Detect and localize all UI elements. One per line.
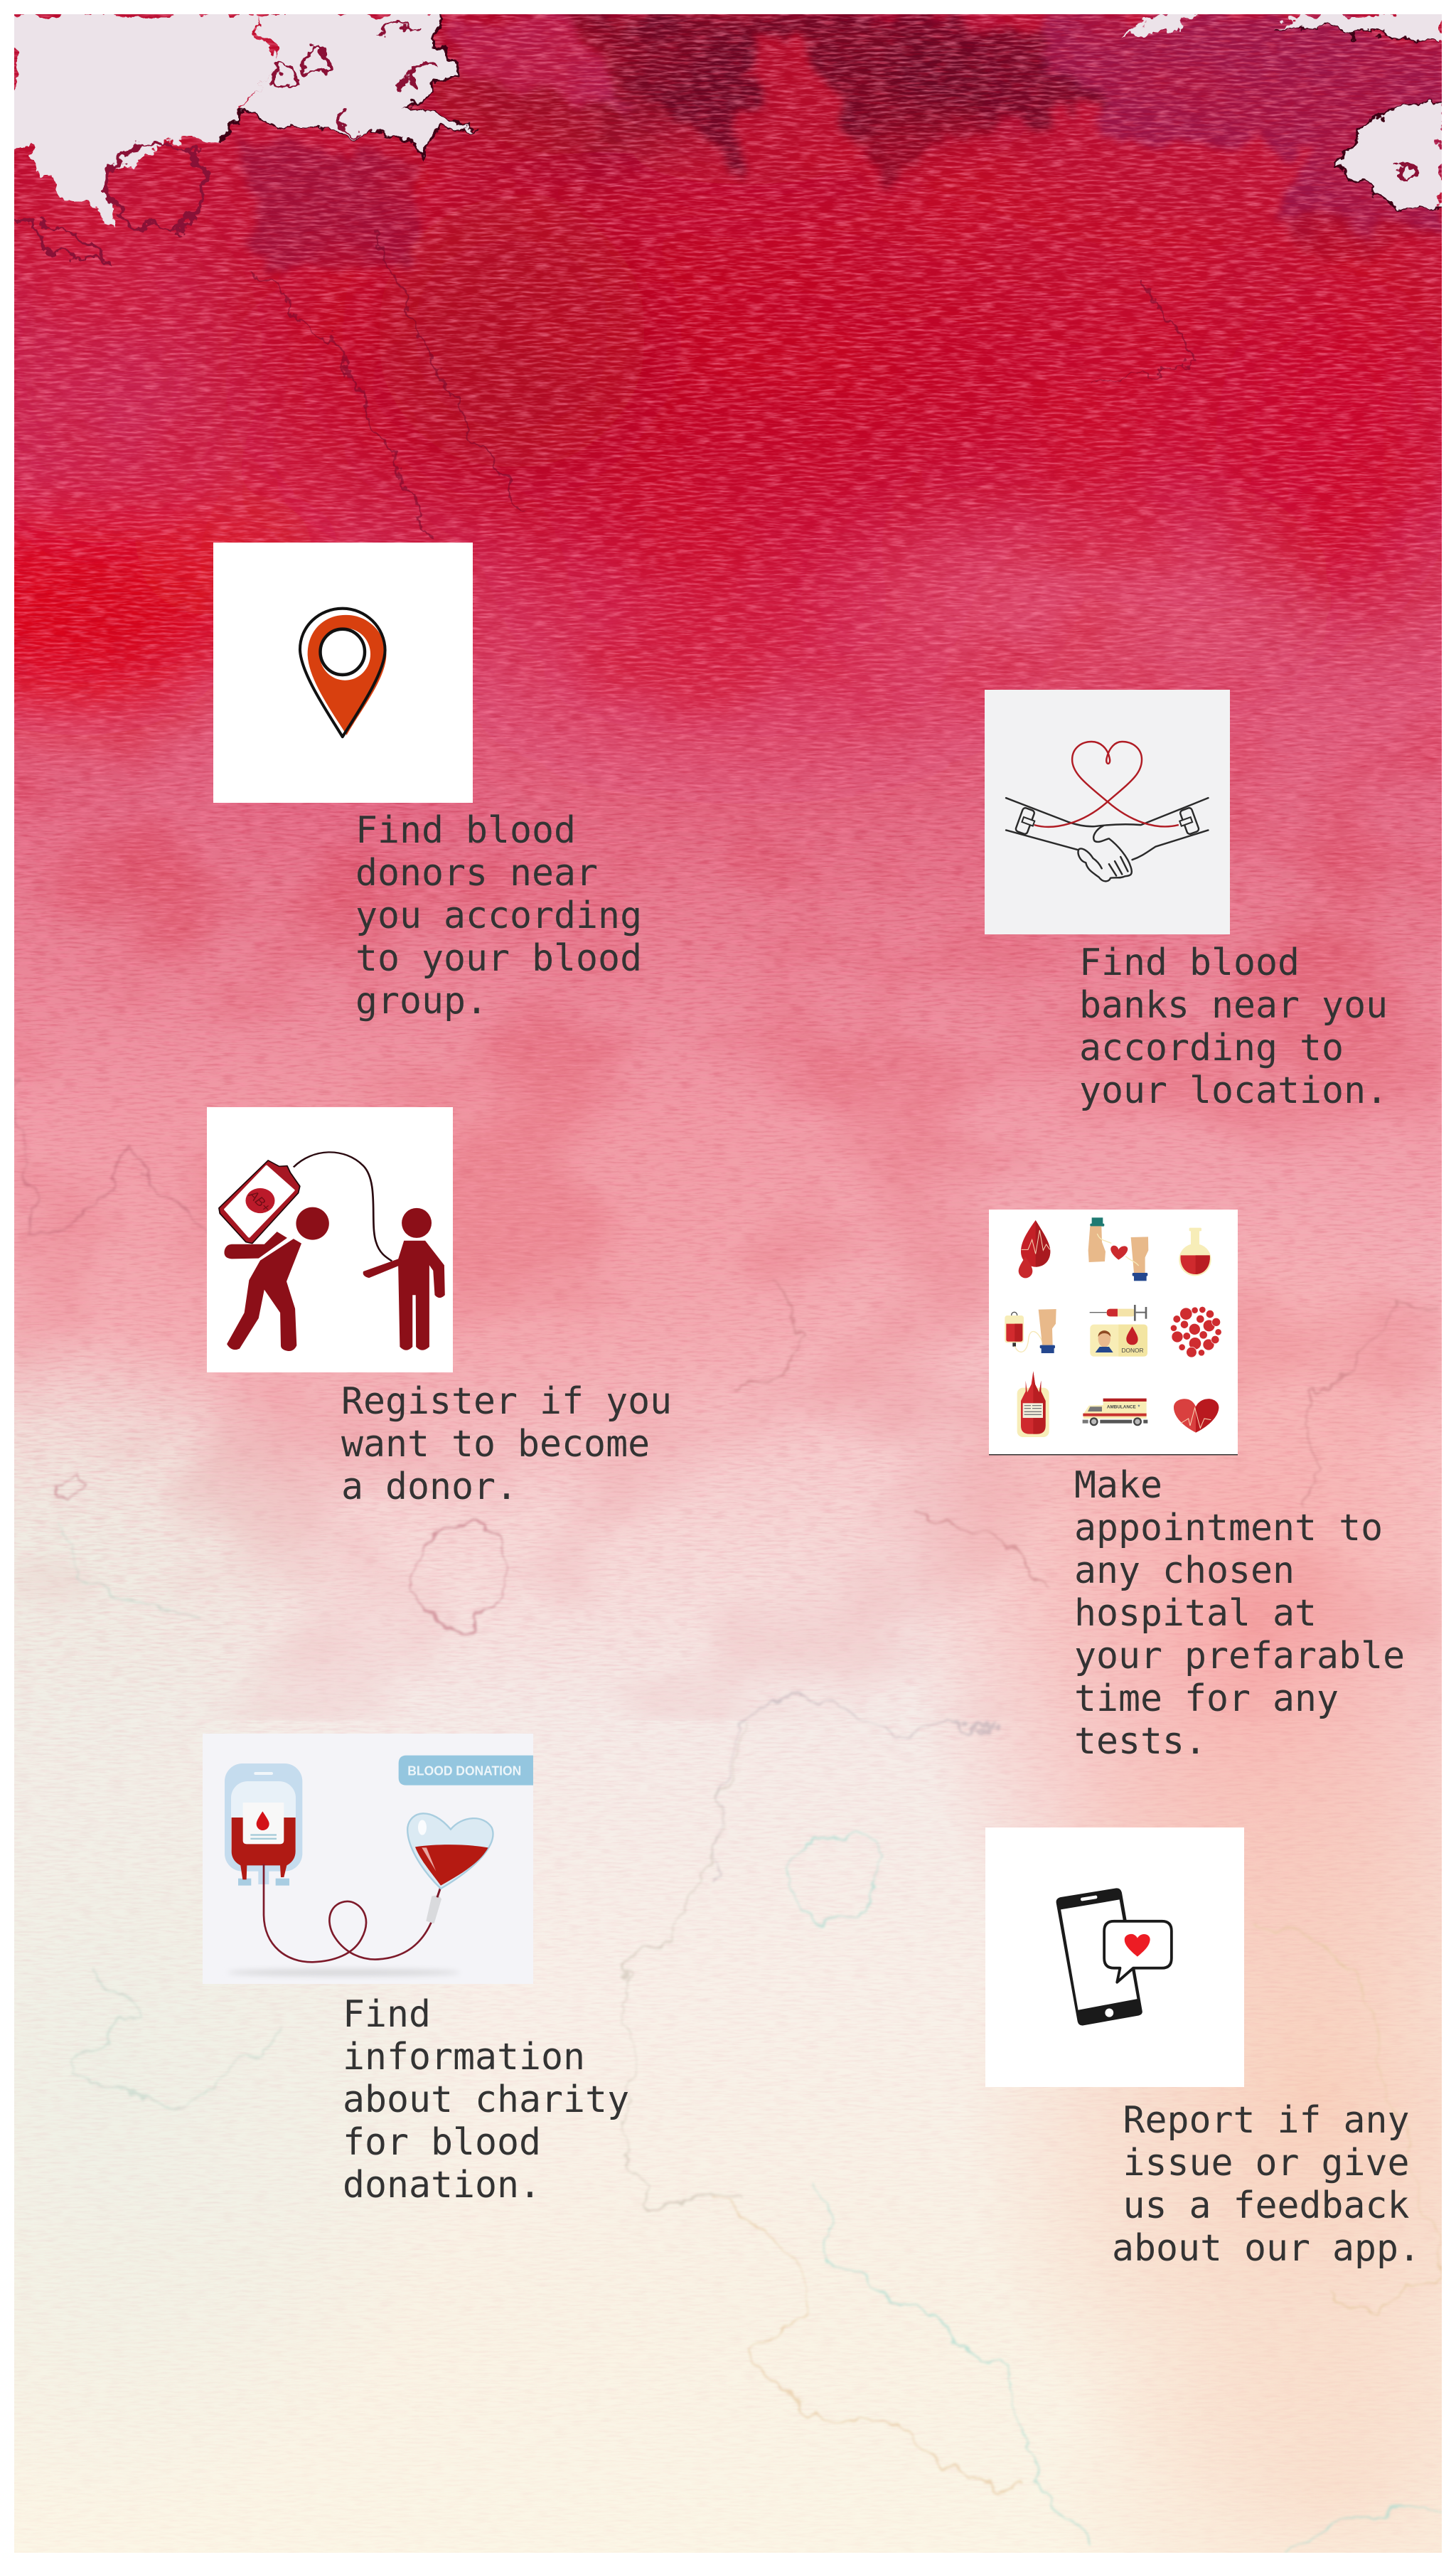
image card: nine medical icons bbox=[989, 1210, 1238, 1455]
panel: find blood banks bbox=[985, 690, 1388, 1112]
text: make appointment: appointment to bbox=[1074, 1507, 1383, 1549]
icon: syringe and donor card: DONOR bbox=[1121, 1347, 1143, 1354]
image card: donor and blood bag figures bbox=[207, 1107, 453, 1372]
panel: find donors bbox=[213, 543, 642, 1023]
text: make appointment: tests. bbox=[1074, 1720, 1206, 1763]
image card: blood donation bag and heart: BLOOD DONATION bbox=[407, 1763, 521, 1778]
text: charity information: information bbox=[343, 2036, 585, 2078]
text: report and feedback: issue or give bbox=[1123, 2142, 1410, 2184]
background: pale unpainted corners bbox=[14, 14, 1442, 537]
icon: blood bag bbox=[1017, 1371, 1049, 1437]
icon: ambulance: * bbox=[1138, 1404, 1140, 1410]
text: charity information: donation. bbox=[343, 2164, 541, 2206]
icon: ambulance bbox=[1083, 1399, 1147, 1426]
text: find blood donors: you according bbox=[355, 895, 642, 937]
background: magenta staining at the top edge bbox=[242, 14, 1442, 276]
panel: register as donor bbox=[207, 1107, 672, 1508]
text: make appointment: time for any bbox=[1074, 1677, 1339, 1720]
text: find blood banks: according to bbox=[1079, 1027, 1344, 1069]
icon: syringe and donor card bbox=[1090, 1305, 1147, 1357]
text: charity information: about charity bbox=[343, 2078, 629, 2121]
image card: phone with heart message bbox=[985, 1827, 1244, 2087]
text: charity information: Find bbox=[343, 1993, 431, 2036]
image card: blood donation bag and heart bbox=[203, 1734, 533, 1984]
text: register: Register if you bbox=[341, 1380, 672, 1423]
panel: make appointment bbox=[989, 1210, 1405, 1763]
image card: location pin bbox=[213, 543, 473, 803]
image card: handshake with heart bbox=[985, 690, 1230, 934]
text: find blood donors: donors near bbox=[355, 852, 598, 895]
text: report and feedback: Report if any bbox=[1123, 2099, 1410, 2142]
text: find blood donors: Find blood bbox=[355, 809, 576, 852]
icon: blood drop bbox=[1019, 1220, 1050, 1278]
text: make appointment: your prefarable bbox=[1074, 1635, 1405, 1677]
icon: hands and heart bbox=[1088, 1217, 1148, 1281]
text: find blood banks: your location. bbox=[1079, 1069, 1388, 1112]
text: make appointment: hospital at bbox=[1074, 1592, 1317, 1635]
icon: heart with pulse bbox=[1174, 1399, 1219, 1433]
panel: charity information bbox=[203, 1734, 629, 2206]
text: find blood donors: group. bbox=[355, 980, 488, 1023]
text: report and feedback: about our app. bbox=[1112, 2227, 1420, 2270]
panel: report and feedback bbox=[985, 1827, 1420, 2270]
text: find blood banks: Find blood bbox=[1079, 941, 1300, 984]
text: charity information: for blood bbox=[343, 2121, 541, 2164]
text: make appointment: any chosen bbox=[1074, 1549, 1295, 1592]
icon: blood cells bbox=[1170, 1306, 1221, 1357]
text: report and feedback: us a feedback bbox=[1123, 2184, 1410, 2227]
text: register: a donor. bbox=[341, 1466, 518, 1508]
text: register: want to become bbox=[341, 1423, 650, 1466]
icon: ambulance: AMBULANCE bbox=[1107, 1404, 1136, 1409]
text: find blood donors: to your blood bbox=[355, 937, 642, 980]
background: dried pigment contour lines bbox=[14, 1081, 1442, 2552]
icon: flask bbox=[1179, 1228, 1211, 1276]
icon: drip bag and arm bbox=[1005, 1309, 1056, 1353]
image card: donor and blood bag figures: AB+ bbox=[245, 1188, 275, 1215]
text: make appointment: Make bbox=[1074, 1464, 1162, 1507]
text: find blood banks: banks near you bbox=[1079, 984, 1388, 1027]
